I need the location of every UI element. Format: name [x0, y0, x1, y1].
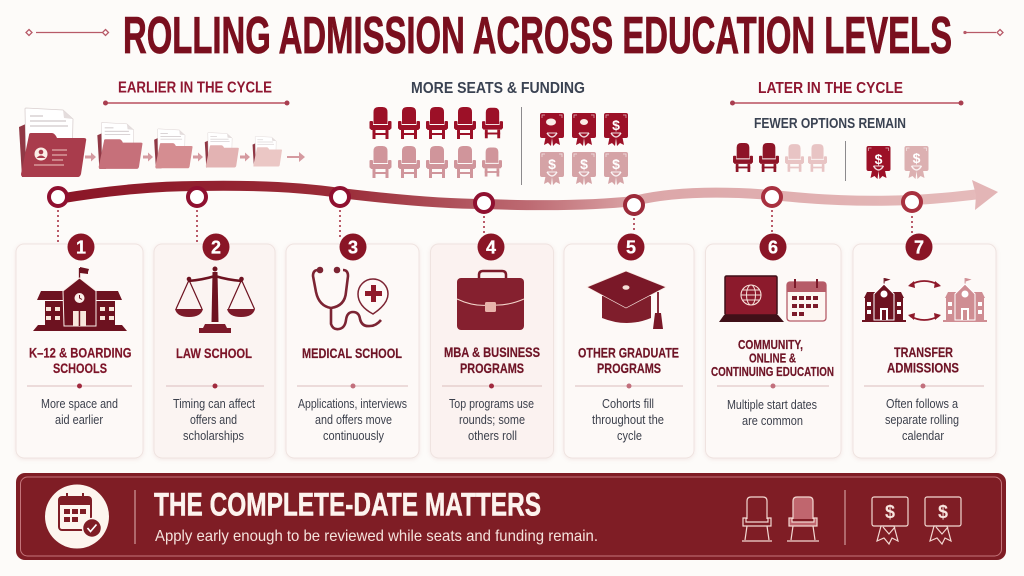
icon: school [33, 267, 127, 331]
card heading [711, 338, 834, 379]
card body: are common [742, 414, 803, 428]
card body: More space and [41, 397, 118, 411]
card heading: TRANSFER [894, 344, 953, 360]
card heading: K–12 & BOARDING [29, 344, 132, 360]
icon: folder 4 [205, 133, 239, 167]
arrows between folders [85, 152, 305, 162]
icon: briefcase [457, 271, 524, 330]
icon: folder 5 [253, 136, 282, 167]
card body [173, 397, 255, 443]
card heading: LAW SCHOOL [176, 345, 252, 361]
number badges [68, 234, 932, 260]
card body: Multiple start dates [727, 398, 817, 412]
funding awards grid: $ [580, 156, 588, 172]
icon: school dark [862, 278, 906, 322]
icon: transfer arrows [908, 281, 941, 320]
card body: throughout the [592, 413, 664, 427]
timeline nodes [49, 188, 921, 214]
banner subtext: Apply early enough to be reviewed while seats and funding remain. [155, 528, 598, 545]
card heading: MBA & BUSINESS [444, 344, 540, 360]
timeline connectors [58, 210, 912, 243]
number badges: 1 [76, 238, 86, 258]
card body: cycle [617, 429, 642, 443]
card body: Applications, interviews [298, 397, 407, 411]
card body: separate rolling [885, 413, 959, 427]
card heading [29, 344, 132, 376]
number badges: 3 [348, 238, 358, 258]
number badges: 4 [486, 238, 496, 258]
banner heading: THE COMPLETE-DATE MATTERS [154, 486, 541, 522]
card body [41, 397, 118, 427]
panel: law school [154, 244, 275, 458]
icon: folder 3 [154, 129, 193, 168]
section heading: earlier in the cycle [103, 80, 290, 106]
card body [298, 397, 407, 443]
card body: calendar [902, 429, 944, 443]
card body: rounds; some [459, 413, 525, 427]
card body: Often follows a [886, 397, 958, 411]
folder 1 applicant badge [34, 148, 67, 165]
icon: laptop [719, 276, 784, 322]
title ornament left [26, 30, 108, 36]
panel: K-12 and boarding schools [16, 244, 143, 458]
number badges: 5 [626, 238, 636, 258]
card heading: PROGRAMS [597, 360, 661, 376]
application folders shrinking [19, 108, 305, 177]
fewer seats [733, 143, 827, 172]
number badges: 7 [914, 238, 924, 258]
icon: folder 2 [97, 123, 142, 169]
card heading [887, 344, 959, 376]
seats grid [370, 107, 503, 178]
section heading: later in the cycle [730, 80, 964, 106]
fewer awards: $ [875, 151, 883, 167]
panel: other graduate programs [564, 244, 694, 458]
panel: community, online and continuing education [706, 244, 841, 458]
card body: Top programs use [449, 397, 534, 411]
card body: others roll [468, 429, 517, 443]
section heading: later in the cycle: LATER IN THE CYCLE [758, 80, 903, 97]
icon: graduation cap [587, 271, 666, 329]
card body [449, 397, 534, 443]
fewer awards: $ [913, 150, 921, 166]
section heading: more seats and funding: MORE SEATS & FUNDING [411, 80, 585, 97]
card body [885, 397, 959, 443]
card body [727, 398, 817, 428]
icon: calendar [787, 279, 826, 321]
card heading [444, 344, 540, 376]
title ornament right [964, 30, 1003, 36]
award dollar signs: $ [885, 502, 895, 522]
card body: Timing can affect [173, 397, 255, 411]
panel: transfer admissions [853, 244, 996, 458]
section heading: earlier in the cycle: EARLIER IN THE CYCLE [118, 80, 272, 96]
fewer awards [866, 146, 928, 179]
panel: MBA and business programs [430, 244, 554, 458]
timeline arrow [58, 180, 998, 210]
award dollar signs [885, 502, 948, 522]
card heading: COMMUNITY, [738, 338, 803, 352]
award dollar signs: $ [938, 502, 948, 522]
card body: continuously [323, 429, 385, 443]
card body: and offers move [315, 413, 392, 427]
number badges: 6 [768, 238, 778, 258]
card heading: PROGRAMS [460, 360, 524, 376]
card heading: ONLINE & [749, 352, 796, 366]
icon: folder large [19, 108, 86, 177]
banner: the complete date matters [16, 473, 1006, 560]
funding awards grid: $ [548, 156, 556, 172]
card body [592, 397, 664, 443]
card body: offers and [190, 413, 237, 427]
icon: school light [943, 278, 987, 322]
number badges: 2 [211, 238, 221, 258]
icon: scales of justice [175, 266, 255, 333]
card heading: MEDICAL SCHOOL [302, 345, 402, 361]
card body: Cohorts fill [602, 397, 654, 411]
icon: outlined seats [742, 497, 819, 541]
funding awards grid [540, 113, 628, 185]
icon: stethoscope [313, 268, 388, 329]
card heading: CONTINUING EDUCATION [711, 365, 834, 379]
card heading: SCHOOLS [53, 360, 107, 376]
card heading [578, 344, 679, 376]
card body: aid earlier [55, 413, 103, 427]
card heading: ADMISSIONS [887, 360, 959, 376]
sub heading: fewer options remain: FEWER OPTIONS REMAIN [754, 115, 906, 132]
funding awards grid: $ [612, 156, 620, 172]
panel: medical school [286, 244, 419, 458]
icon: calendar with check [45, 484, 109, 548]
card heading: OTHER GRADUATE [578, 344, 679, 360]
card body: scholarships [183, 429, 244, 443]
icon: outlined awards [872, 497, 961, 544]
funding awards grid: $ [612, 117, 620, 133]
